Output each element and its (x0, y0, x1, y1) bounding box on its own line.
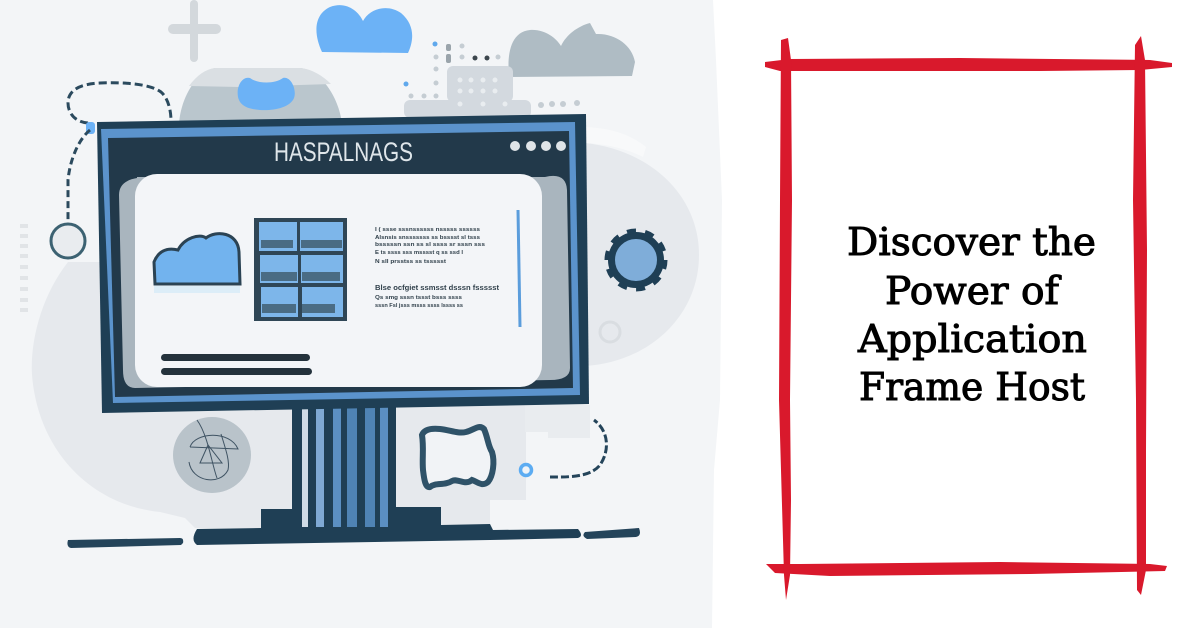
headline: Application (857, 317, 1087, 361)
dashed connector top left (68, 83, 171, 123)
monitor dark inner (108, 131, 573, 397)
icon: blue ring (520, 464, 532, 476)
icon: blue cloud top (316, 5, 412, 53)
screen text lines: Qs smg sssn tssst bsss ssss (375, 295, 462, 301)
icon: plus (168, 0, 221, 62)
screen text lines: N sll prsstss ss tssssst (375, 259, 446, 265)
icon: grey globe (173, 417, 251, 493)
icon: gear (607, 231, 665, 289)
screen text lines (375, 227, 500, 309)
icon: hand-drawn outline blob (422, 427, 493, 487)
screen text lines: sssn Fsl jsss msss ssss lssss ss (375, 303, 463, 309)
app grid (254, 218, 347, 321)
monitor white screen (135, 174, 542, 387)
monitor title: HASPALNAGS (274, 137, 413, 167)
icon: blue node (86, 122, 95, 134)
screen text lines: Alsnsis snsssssss ss bsssst sl tsss (375, 235, 480, 241)
headline: Frame Host (859, 365, 1085, 409)
monitor blue frame (101, 122, 580, 403)
icon: dome with blue shape (179, 68, 342, 125)
monitor grey screen layer (119, 176, 570, 388)
red frame (765, 36, 1172, 600)
monitor bezel (97, 114, 589, 413)
screen text lines: Blse ocfgiet ssmsst dsssn fssssst (375, 285, 500, 292)
dotted block pattern (404, 42, 580, 118)
monitor (97, 114, 589, 413)
screen text lines: E ts ssss sss msssst q ss ssd l (375, 250, 464, 256)
window dots (510, 141, 566, 151)
screen text lines: bsssssn ssn ss sl ssss sr sssn sss (375, 242, 485, 248)
icon: small ring right (600, 322, 620, 342)
screen blue rule (518, 210, 520, 327)
background blobs (32, 127, 699, 528)
icon: ring node left (51, 224, 85, 258)
headline: Power of (885, 269, 1062, 313)
dotted ticks left (20, 224, 28, 312)
screen text lines: I ( ssse sssnssssss nsssss ssssss (375, 227, 480, 233)
icon: screen cloud (154, 234, 240, 293)
headline (847, 220, 1096, 409)
panel: illustration background (0, 0, 722, 628)
dashed connector bottom right (550, 420, 606, 477)
screen dark bars (161, 354, 312, 375)
icon: grey cloud top (508, 23, 635, 77)
headline: Discover the (847, 220, 1096, 264)
monitor stand (67, 405, 640, 548)
dashed connector left (68, 130, 90, 222)
